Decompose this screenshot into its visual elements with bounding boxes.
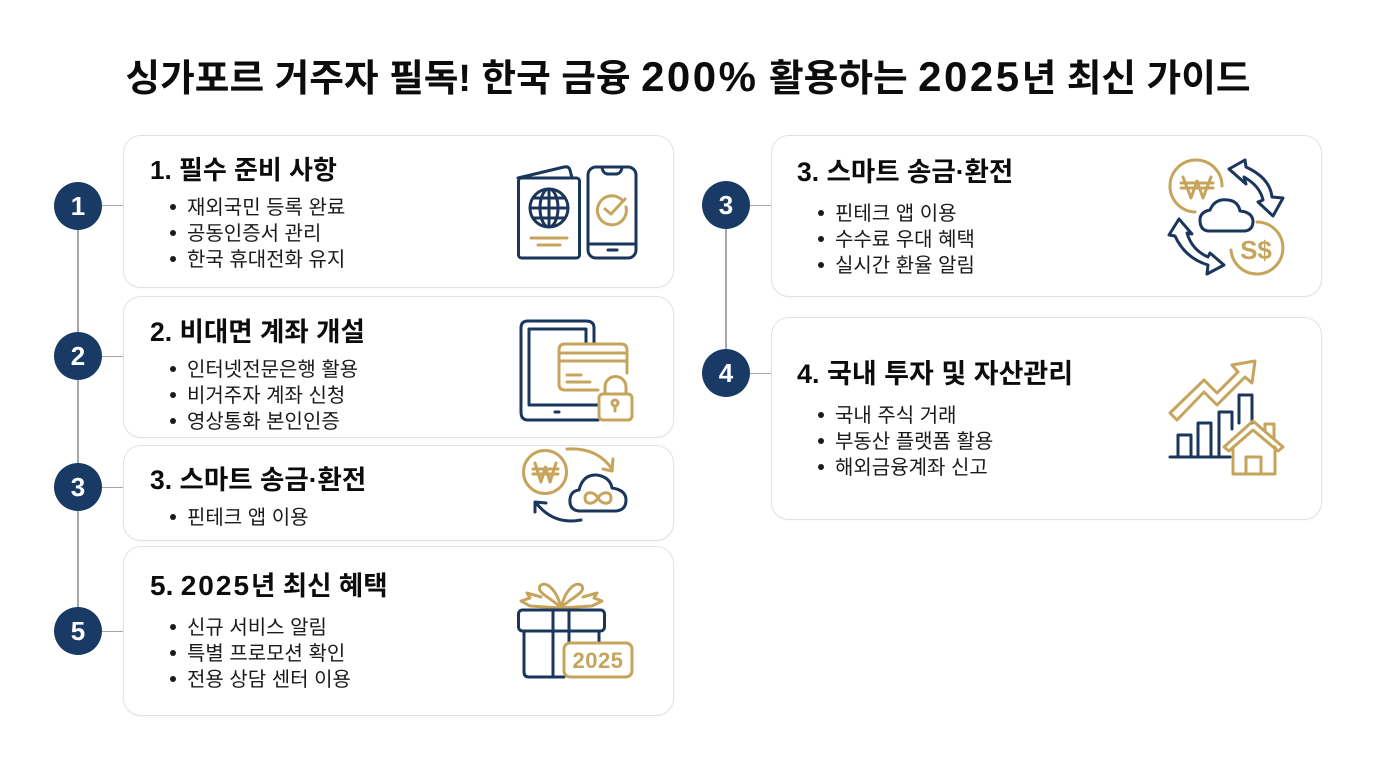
heading: 5. 2025년 최신 혜택 bbox=[150, 570, 388, 601]
heading: 2. 비대면 계좌 개설 bbox=[150, 317, 365, 347]
right timeline connector bbox=[725, 205, 727, 373]
bullet list: 영상통화 본인인증 bbox=[187, 411, 340, 433]
bullet list: 핀테크 앱 이용 bbox=[187, 507, 309, 529]
connector: step 1 bbox=[78, 205, 123, 206]
badge right 4 bbox=[702, 349, 750, 397]
heading: 3. 스마트 송금·환전 bbox=[797, 157, 1013, 187]
title: 싱가포르 거주자 필독! 한국 금융 200% 활용하는 2025년 최신 가이드 bbox=[125, 53, 1251, 100]
connector: right step 4 bbox=[726, 373, 771, 374]
bullet list: 신규 서비스 알림 bbox=[187, 617, 327, 639]
heading: 1. 필수 준비 사항 bbox=[150, 155, 337, 185]
connector: step 2 bbox=[78, 356, 123, 357]
bullet list: 특별 프로모션 확인 bbox=[187, 643, 345, 665]
badge right 4: 4 bbox=[719, 358, 733, 388]
badge 3 bbox=[54, 463, 102, 511]
badge 2: 2 bbox=[71, 341, 85, 371]
panel: 5. 2025 benefits bbox=[123, 546, 674, 716]
connector: right step 3 bbox=[726, 205, 771, 206]
bullet list: 국내 주식 거래 bbox=[835, 405, 957, 427]
bullet list: 재외국민 등록 완료 bbox=[187, 197, 345, 219]
bullet list: 부동산 플랫폼 활용 bbox=[835, 431, 993, 453]
badge 5: 5 bbox=[71, 616, 85, 646]
connector: step 3 bbox=[78, 487, 123, 488]
bullet list: 수수료 우대 혜택 bbox=[835, 229, 975, 251]
bullet list: 비거주자 계좌 신청 bbox=[187, 385, 345, 407]
icon: growth chart and house bbox=[1168, 360, 1284, 476]
badge 3: 3 bbox=[71, 472, 85, 502]
left timeline connector bbox=[77, 206, 79, 631]
badge 5 bbox=[54, 607, 102, 655]
badge 1: 1 bbox=[71, 191, 85, 221]
icon: passport and phone bbox=[516, 165, 638, 260]
bullet list bbox=[170, 617, 351, 691]
icon: currency exchange cloud bbox=[1167, 158, 1284, 276]
icon: gift box with 2025 tag bbox=[517, 582, 634, 678]
icon: won coin and cloud bbox=[522, 447, 628, 522]
bullet list: 인터넷전문은행 활용 bbox=[187, 359, 358, 381]
badge 1 bbox=[54, 182, 102, 230]
bullet list bbox=[818, 405, 993, 479]
bullet list bbox=[170, 197, 345, 271]
badge 2 bbox=[54, 332, 102, 380]
heading: 4. 국내 투자 및 자산관리 bbox=[797, 359, 1073, 389]
icon: currency exchange cloud: S$ bbox=[1240, 235, 1272, 265]
icon: gift box with 2025 tag: 2025 bbox=[573, 648, 623, 673]
heading: 3. 스마트 송금·환전 bbox=[150, 465, 366, 495]
panel: 2. remote account bbox=[123, 296, 674, 438]
bullet list bbox=[818, 203, 975, 277]
badge right 3: 3 bbox=[719, 190, 733, 220]
bullet list: 해외금융계좌 신고 bbox=[835, 457, 988, 479]
bullet list bbox=[170, 359, 358, 433]
bullet list: 한국 휴대전화 유지 bbox=[187, 249, 345, 271]
panel: right 4. domestic investment bbox=[771, 317, 1322, 520]
bullet list: 공동인증서 관리 bbox=[187, 223, 321, 245]
bullet list: 실시간 환율 알림 bbox=[835, 255, 975, 277]
panel: 1. essentials bbox=[123, 135, 674, 288]
bullet list: 핀테크 앱 이용 bbox=[835, 203, 957, 225]
badge right 3 bbox=[702, 181, 750, 229]
connector: step 5 bbox=[78, 631, 123, 632]
panel: right 3. smart remittance bbox=[771, 135, 1322, 297]
icon: tablet, card and lock bbox=[520, 320, 634, 422]
bullet list: 전용 상담 센터 이용 bbox=[187, 669, 351, 691]
panel: 3. smart remittance bbox=[123, 445, 674, 541]
